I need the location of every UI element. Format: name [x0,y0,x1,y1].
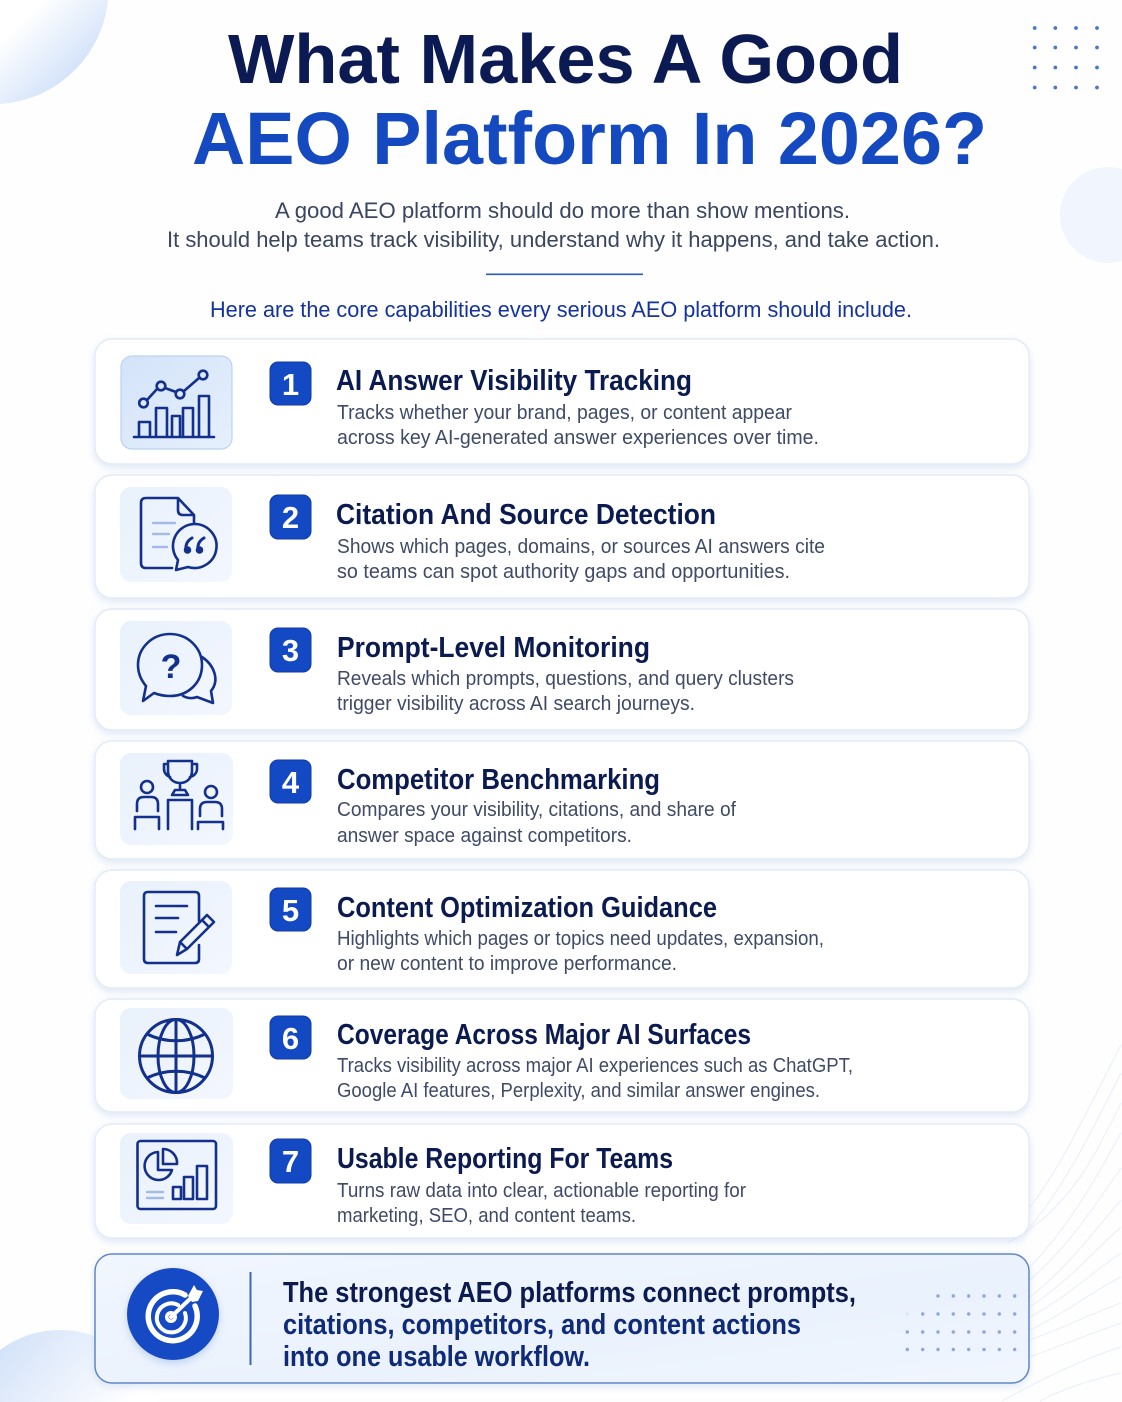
heading 1: AI Answer Visibility Tracking [336,365,692,397]
number badge 6: 6 [282,1021,299,1056]
description 4: Compares your visibility, citations, and share of [337,799,736,821]
heading 6: Coverage Across Major AI Surfaces [337,1019,751,1051]
icon: question speech bubbles [120,621,232,715]
callout text [283,1277,856,1373]
panel: capability 5 [95,870,1029,988]
description 7 [337,1180,746,1227]
description 4 [337,799,736,847]
decorative wave lines: bottom right [1002,1045,1121,1401]
number badge 5 [270,888,311,931]
icon: report dashboard [120,1133,233,1224]
number badge 1 [270,362,311,405]
icon: document with quote bubble [120,487,232,582]
number badge 6 [270,1016,311,1059]
description 6 [337,1055,853,1102]
description 2: so teams can spot authority gaps and opportunities. [337,561,790,583]
icon: question speech bubbles: ? [161,648,181,686]
lead-in sentence: Here are the core capabilities every serious AEO platform should include. [210,297,912,322]
number badge 2: 2 [282,500,299,535]
decorative circle: bottom left [0,1330,156,1402]
panel: capability 4 [95,741,1029,859]
panel: capability 7 [95,1124,1029,1238]
title [192,20,987,180]
panel: capability 2 [95,475,1029,598]
description 7: Turns raw data into clear, actionable reporting for [337,1180,746,1202]
number badge 2 [270,495,311,539]
description 6: Tracks visibility across major AI experiences such as ChatGPT, [337,1055,853,1077]
icon: target with arrow [127,1268,219,1360]
number badge 4 [270,760,311,803]
panel: capability 3 [95,609,1029,730]
description 7: marketing, SEO, and content teams. [337,1205,636,1227]
number badge 4: 4 [282,765,300,800]
number badge 7 [270,1139,311,1183]
description 6: Google AI features, Perplexity, and similar answer engines. [337,1080,820,1102]
description 3: trigger visibility across AI search journeys. [337,693,695,715]
decorative circle: top left [0,0,108,104]
number badge 3 [270,628,311,672]
description 1 [337,402,819,449]
intro text: A good AEO platform should do more than show mentions. [275,198,850,223]
decorative dot grid: callout [906,1294,1016,1351]
decorative circle: right [1060,167,1122,263]
decorative dot grid: top right [1033,26,1099,89]
description 5: Highlights which pages or topics need updates, expansion, [337,928,824,950]
intro text [167,198,940,252]
icon: trophy and competitors on podium [120,753,233,845]
description 2: Shows which pages, domains, or sources AI answers cite [337,536,825,558]
callout text: The strongest AEO platforms connect prompts, [283,1277,856,1309]
number badge 1: 1 [282,367,299,402]
callout: takeaway [95,1254,1029,1383]
description 2 [337,536,825,583]
description 4: answer space against competitors. [337,825,632,847]
icon: line and bar chart [121,356,232,449]
callout text: into one usable workflow. [283,1341,590,1373]
number badge 7: 7 [282,1144,299,1179]
title: What Makes A Good [228,20,903,98]
icon: globe [120,1008,233,1099]
description 5: or new content to improve performance. [337,953,677,975]
description 5 [337,928,824,975]
heading 5: Content Optimization Guidance [337,892,717,924]
heading 2: Citation And Source Detection [336,499,716,531]
icon: document and pencil [120,881,232,974]
title: AEO Platform In 2026? [192,97,987,180]
description 1: Tracks whether your brand, pages, or content appear [337,402,792,424]
heading 3: Prompt-Level Monitoring [337,632,650,664]
heading 7: Usable Reporting For Teams [337,1143,673,1175]
description 3: Reveals which prompts, questions, and query clusters [337,668,794,690]
description 3 [337,668,794,715]
intro text: It should help teams track visibility, understand why it happens, and take action. [167,227,940,252]
number badge 3: 3 [282,633,299,668]
callout text: citations, competitors, and content actions [283,1309,801,1341]
description 1: across key AI-generated answer experiences over time. [337,427,819,449]
panel: capability 6 [95,999,1029,1112]
panel: capability 1 [95,339,1029,464]
heading 4: Competitor Benchmarking [337,764,660,796]
number badge 5: 5 [282,893,299,928]
